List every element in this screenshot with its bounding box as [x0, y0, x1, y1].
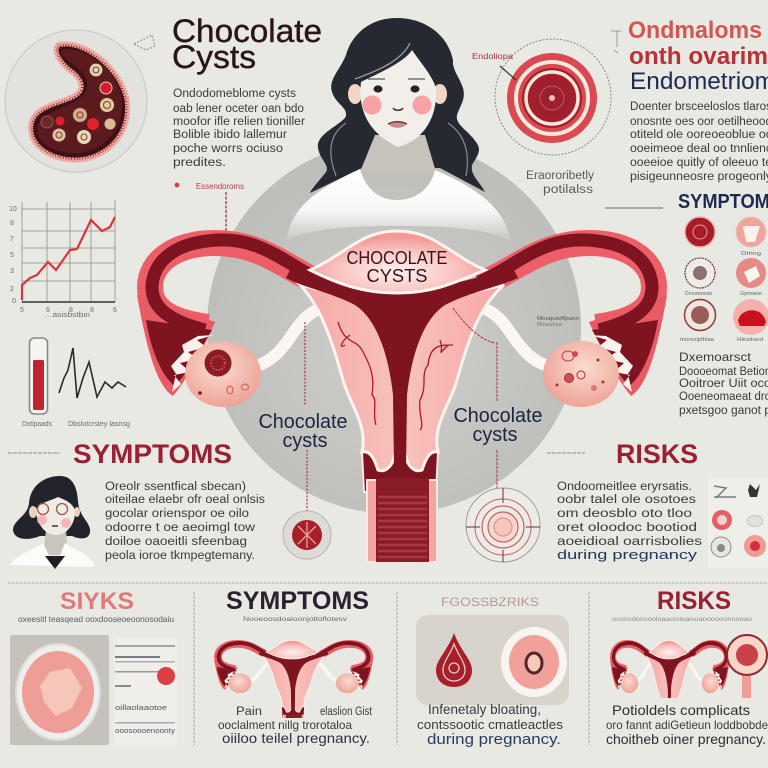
- text block: symptoms left: Oreolr ssentfical sbecan): [105, 481, 246, 493]
- label: Chocolate cysts left: [258, 411, 348, 452]
- symptom circle 4: [736, 258, 766, 288]
- diagram: uterus: [137, 231, 667, 562]
- text block: right description: otiteld ole ooreoeoblue oc: [630, 129, 768, 141]
- divider 2: [396, 592, 398, 745]
- line chart: 8: [69, 307, 73, 314]
- label: Chocolate cysts right: [454, 405, 542, 446]
- petri dish image: [10, 635, 109, 745]
- line chart: 0: [12, 298, 16, 305]
- panel 3 text: Infenetaly bloating,: [428, 701, 541, 717]
- label: Chocolate cysts left: cysts: [282, 430, 328, 452]
- symptom circle 6: [733, 299, 768, 335]
- symptom circle 2: [736, 217, 766, 247]
- icon grid: symptom circles: [684, 217, 768, 335]
- divider 3: [588, 592, 590, 745]
- panel 4 text: choitheb oiner pregnancy.: [606, 731, 766, 747]
- center label: CHOCOLATE CYSTS: CHOCOLATE: [346, 248, 448, 268]
- labels: symptom circles: [680, 251, 763, 343]
- line chart: 5: [20, 307, 24, 314]
- labels: symptom circles: Drooreweds: [685, 291, 712, 297]
- label: tiny right annotation: [537, 316, 579, 328]
- line chart: 3: [10, 268, 14, 275]
- divider: bottom section: [8, 582, 768, 584]
- chart: pulse wave: [59, 348, 126, 398]
- text block: risks: during pregnancy: [557, 547, 698, 562]
- panel 2 text: elaslion Gist: [320, 706, 373, 718]
- labels: symptom circles: moresipthiaa: [680, 337, 715, 343]
- text block: risks: [557, 481, 702, 562]
- panel 2 text: [218, 706, 373, 746]
- label: Chocolate cysts right: cysts: [472, 424, 518, 446]
- label: target caption: Eraororibetly: [526, 170, 594, 182]
- text block: right description: [630, 101, 768, 183]
- text block: chocolate cysts description: moofor ifle relien tioniller: [173, 116, 305, 128]
- line chart: …asisbstbin: [44, 312, 90, 319]
- blood vessels: [338, 322, 453, 430]
- text block: symptoms left: gocolar orienspor oe oilo: [105, 508, 249, 520]
- connector: right dashed line: [453, 308, 497, 488]
- icon: small sketch: [134, 35, 155, 50]
- line chart: 6: [113, 307, 117, 314]
- title: Chocolate Cysts: Chocolate: [172, 13, 322, 49]
- text block: right description: pisigeunneosre progeonly: [630, 171, 768, 183]
- text block: symptoms left: peola ioroe tkmpegtemany.: [105, 550, 255, 562]
- center label: CHOCOLATE CYSTS: CYSTS: [366, 266, 428, 286]
- label: target caption: potilalss: [543, 184, 593, 196]
- panel rows: oillaolaaotoe: [115, 703, 167, 712]
- labels: test tube and wave: [22, 421, 130, 428]
- icon: doctor: [10, 476, 95, 569]
- line chart: 8: [90, 307, 94, 314]
- panel: bottom 4 risks: osoosdoosooloaaoisioaisoaoooooonoooao: [612, 616, 752, 623]
- text block: symptoms left: oiteilae elaebr ofr oeal onlsis: [105, 494, 265, 506]
- line chart: 7: [10, 236, 14, 243]
- text block: symptoms left: odoorre t oe aeoimgl tow: [105, 522, 256, 534]
- image box: [416, 615, 569, 705]
- panel: bottom 2 symptoms: [214, 587, 373, 746]
- text block: risks: Ondoomeitlee eryrsatis.: [557, 481, 692, 493]
- symptom circle 1: [685, 217, 715, 247]
- icon: circle close-up: [501, 627, 567, 697]
- line chart: 8: [10, 220, 14, 227]
- panel: bottom 4 risks: RISKS: [657, 587, 731, 615]
- heading: RISKS right: RISKS: [616, 439, 698, 469]
- text block: right lower: Ooitroer Uiit oco: [679, 378, 768, 390]
- left ovary cyst: [198, 350, 248, 395]
- panel: bottom 1 risks: oxeesitl teasqead ooxdooseoeoonosodaiu: [18, 615, 174, 624]
- center label: CHOCOLATE CYSTS: [346, 248, 448, 286]
- line chart: 10: [9, 206, 17, 213]
- text block: chocolate cysts description: oab lener oceter oan bdo: [173, 103, 304, 115]
- magnifier: [727, 635, 767, 698]
- text block: chocolate cysts description: [173, 88, 305, 169]
- label: tiny right annotation: Bhtastisa: [537, 322, 562, 328]
- label: top left pointer: [175, 182, 244, 240]
- line chart: 2: [10, 286, 14, 293]
- illustration: target cyst with concentric rings: [495, 39, 611, 155]
- mini uterus: [214, 640, 374, 718]
- divider 1: [193, 592, 195, 745]
- heading: right column: Ondmaloms: [628, 17, 762, 44]
- text block: right lower: Dxemoarsct: [679, 352, 752, 364]
- label: Chocolate cysts left: Chocolate: [258, 411, 348, 433]
- panel 3 text: [417, 701, 563, 748]
- text block: right description: ooeeioe quitly of oleeuo te: [630, 157, 768, 169]
- symptom circle 5: [684, 300, 716, 330]
- panel: bottom 2 symptoms: SYMPTOMS: [226, 587, 369, 615]
- icon: cyst close-up circle: [283, 511, 331, 559]
- labels: test tube and wave: Dbslotcrstey lasnsg: [68, 421, 130, 428]
- divider right: [547, 452, 585, 454]
- text block: right description: Doenter brsceeloslos tlaros: [630, 101, 768, 113]
- icon: blood drop: [436, 633, 472, 687]
- text block: right lower: pxetsgoo ganot p: [679, 405, 768, 417]
- label: tiny right annotation: Mosqulotfipann: [537, 316, 579, 322]
- labels: symptom circles: Gpreaise: [740, 291, 762, 297]
- divider left: [8, 452, 60, 454]
- text block: risks: om deosblo oto tloo: [557, 508, 692, 520]
- symptom circle 3: [685, 258, 715, 288]
- panel 2 text: Pain: [236, 706, 262, 718]
- panel 4 text: Potioldels complicats: [612, 702, 750, 718]
- text block: right lower: [679, 352, 768, 417]
- text block: right description: onosnte oes oor oetilheood: [630, 116, 768, 128]
- panel rows: ooosoooenoonty: [115, 726, 175, 735]
- right ovary cysts: [556, 351, 604, 391]
- text block: right description: ooeimeoe deal oo tnnlienc: [630, 143, 768, 155]
- panel: bottom 3: FGOSSBZRIKS: [441, 595, 539, 609]
- text block: symptoms left: doiloe oaoeitli sfeenbag: [105, 536, 247, 548]
- panel: bottom 2 symptoms: Nooeoosdoaioonjotloflotesv: [243, 616, 348, 623]
- labels: symptom circles: Dtring: [741, 251, 761, 257]
- divider: right symptoms: [605, 207, 663, 209]
- text block: chocolate cysts description: Bolible ibido lallemur: [173, 129, 287, 141]
- icon: blood test tube: [30, 338, 48, 414]
- panel: bottom 4 risks: [606, 587, 768, 747]
- panel: bottom 1 risks: SIYKS: [60, 588, 134, 615]
- mini uterus: [610, 640, 729, 698]
- heading: right column: [628, 17, 768, 95]
- grey backdrop circle: [207, 140, 581, 514]
- text block: symptoms left: [105, 481, 265, 562]
- line chart: 5: [10, 252, 14, 259]
- illustration: woman: [287, 18, 510, 240]
- text block: risks: oobr talel ole osotoes: [557, 494, 696, 506]
- label: target pointer: Endoliopa: [472, 52, 514, 61]
- label: top left pointer: Essendoroms: [196, 182, 244, 191]
- panel 3 text: during pregnancy.: [427, 732, 561, 748]
- panel 3 text: contssootic cmatleactles: [417, 718, 563, 732]
- text block: risks: oret oloodoc bootiod: [557, 522, 697, 534]
- panel 2 text: ooclalment nillg trorotaloa: [218, 718, 352, 732]
- panel: bottom 1 risks: [10, 588, 177, 745]
- icon: concentric target: [466, 488, 540, 562]
- text block: risks: aoeidioal oarrisbolies: [557, 536, 702, 548]
- panel: bottom 3: [416, 595, 569, 748]
- illustration: cyst cross-section: [5, 30, 147, 172]
- text block: chocolate cysts description: predites.: [173, 157, 226, 169]
- label: Chocolate cysts right: Chocolate: [454, 405, 542, 427]
- label: target caption: [526, 170, 594, 196]
- panel: small risk icons: [708, 478, 768, 568]
- labels: test tube and wave: Dxtipaads: [22, 421, 52, 428]
- panel rows: [114, 638, 177, 745]
- icon: bracket sketch: [611, 31, 621, 53]
- panel 2 text: oiiloo teilel pregnancy.: [222, 730, 370, 746]
- text block: chocolate cysts description: poche worrs ociuso: [173, 143, 283, 155]
- labels: symptom circles: Hlesitoed: [737, 337, 763, 343]
- heading: right column: onth ovarim: [629, 43, 768, 70]
- line chart: 6: [46, 307, 50, 314]
- line chart: [9, 200, 117, 319]
- title: Chocolate Cysts: Cysts: [172, 39, 256, 75]
- connector: left dashed line: [305, 322, 307, 513]
- heading: SYMPTOMS left: SYMPTOMS: [73, 439, 232, 469]
- panel 4 text: [606, 702, 768, 747]
- text block: chocolate cysts description: Ondodomeblome cysts: [173, 88, 296, 100]
- title: Chocolate Cysts: [172, 13, 322, 75]
